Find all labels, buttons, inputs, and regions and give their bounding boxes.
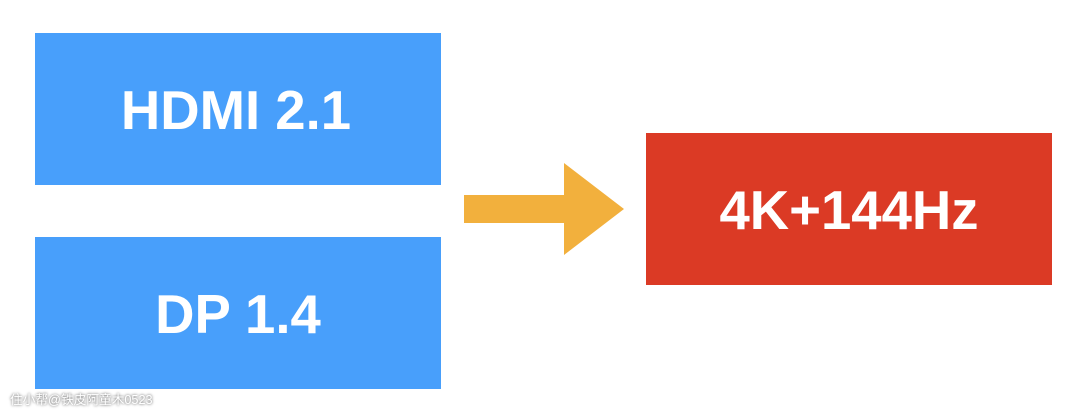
panel: 4K+144Hz <box>646 133 1052 285</box>
panel: 4K+144Hz: 4K+144Hz <box>719 180 979 240</box>
arrow <box>464 163 624 255</box>
panel: DP 1.4: DP 1.4 <box>155 284 321 344</box>
panel: DP 1.4 <box>35 237 441 389</box>
watermark: 住小帮@铁皮阿童木0523 <box>10 393 153 407</box>
panel: HDMI 2.1 <box>35 33 441 185</box>
panel: HDMI 2.1: HDMI 2.1 <box>121 80 351 140</box>
